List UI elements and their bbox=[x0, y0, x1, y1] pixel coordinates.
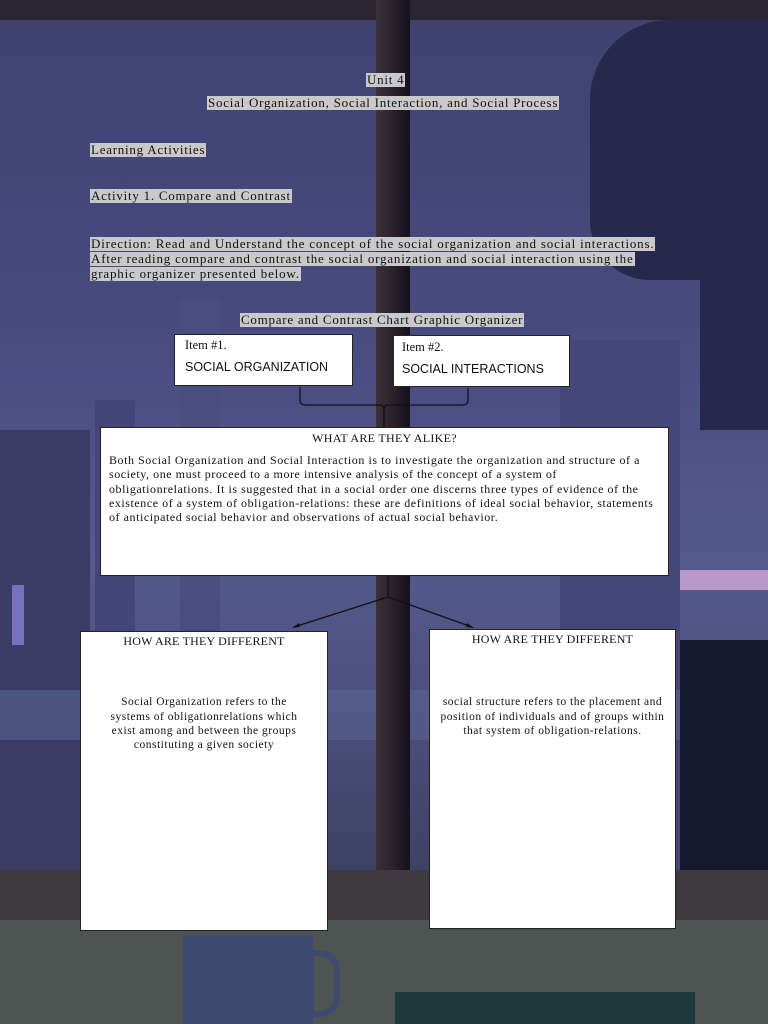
icon: mug bbox=[183, 935, 340, 1024]
book bbox=[395, 992, 695, 1024]
text: direction: Direction: Read and Understand the concept of the social organization and social interactions. bbox=[91, 236, 654, 251]
panel: different left: HOW ARE THEY DIFFERENT bbox=[123, 634, 285, 648]
heading: activity 1: Activity 1. Compare and Contrast bbox=[91, 188, 291, 203]
text: direction bbox=[90, 236, 655, 281]
background: city skyline bbox=[0, 360, 768, 870]
title: Social Organization, Social Interaction, and Social Process bbox=[208, 95, 558, 110]
panel: different left: Social Organization refers to the systems of obligationrelations which exist among and between the groups constituting a given society bbox=[111, 696, 297, 751]
panel: alike bbox=[100, 427, 669, 576]
panel: different right: HOW ARE THEY DIFFERENT bbox=[472, 632, 633, 646]
box: item 2: Item #2. bbox=[402, 340, 444, 354]
panel: different right bbox=[429, 629, 676, 929]
box: item 1 bbox=[174, 334, 353, 386]
panel: alike: WHAT ARE THEY ALIKE? bbox=[312, 431, 457, 445]
background: window frame bbox=[0, 0, 768, 20]
text: direction: After reading compare and contrast the social organization and social interaction using the bbox=[91, 251, 634, 266]
heading: learning activities: Learning Activities bbox=[91, 142, 205, 157]
box: item 2: SOCIAL INTERACTIONS bbox=[402, 362, 544, 376]
heading: unit: Unit 4 bbox=[367, 72, 404, 87]
box: item 1: Item #1. bbox=[185, 338, 227, 352]
panel: different right: social structure refers to the placement and position of individuals and of groups within that system of obligation-relations. bbox=[441, 696, 664, 737]
box: item 1: SOCIAL ORGANIZATION bbox=[185, 360, 328, 374]
background: table bbox=[0, 920, 768, 1024]
panel: alike: Both Social Organization and Social Interaction is to investigate the organization and structure of a society, one must proceed to a more intensive analysis of the concept of a system of obligationrelations. It is suggested that in a social order one discerns three types of evidence of the existence of a system of obligation-relations: these are definitions of ideal social behavior, statements of anticipated social behavior and observations of actual social behavior. bbox=[109, 453, 653, 524]
background: tree bbox=[590, 20, 768, 280]
box: item 2 bbox=[393, 335, 570, 387]
text: direction: graphic organizer presented below. bbox=[91, 266, 300, 281]
heading: chart label: Compare and Contrast Chart Graphic Organizer bbox=[241, 312, 523, 327]
panel: different left bbox=[80, 631, 328, 931]
